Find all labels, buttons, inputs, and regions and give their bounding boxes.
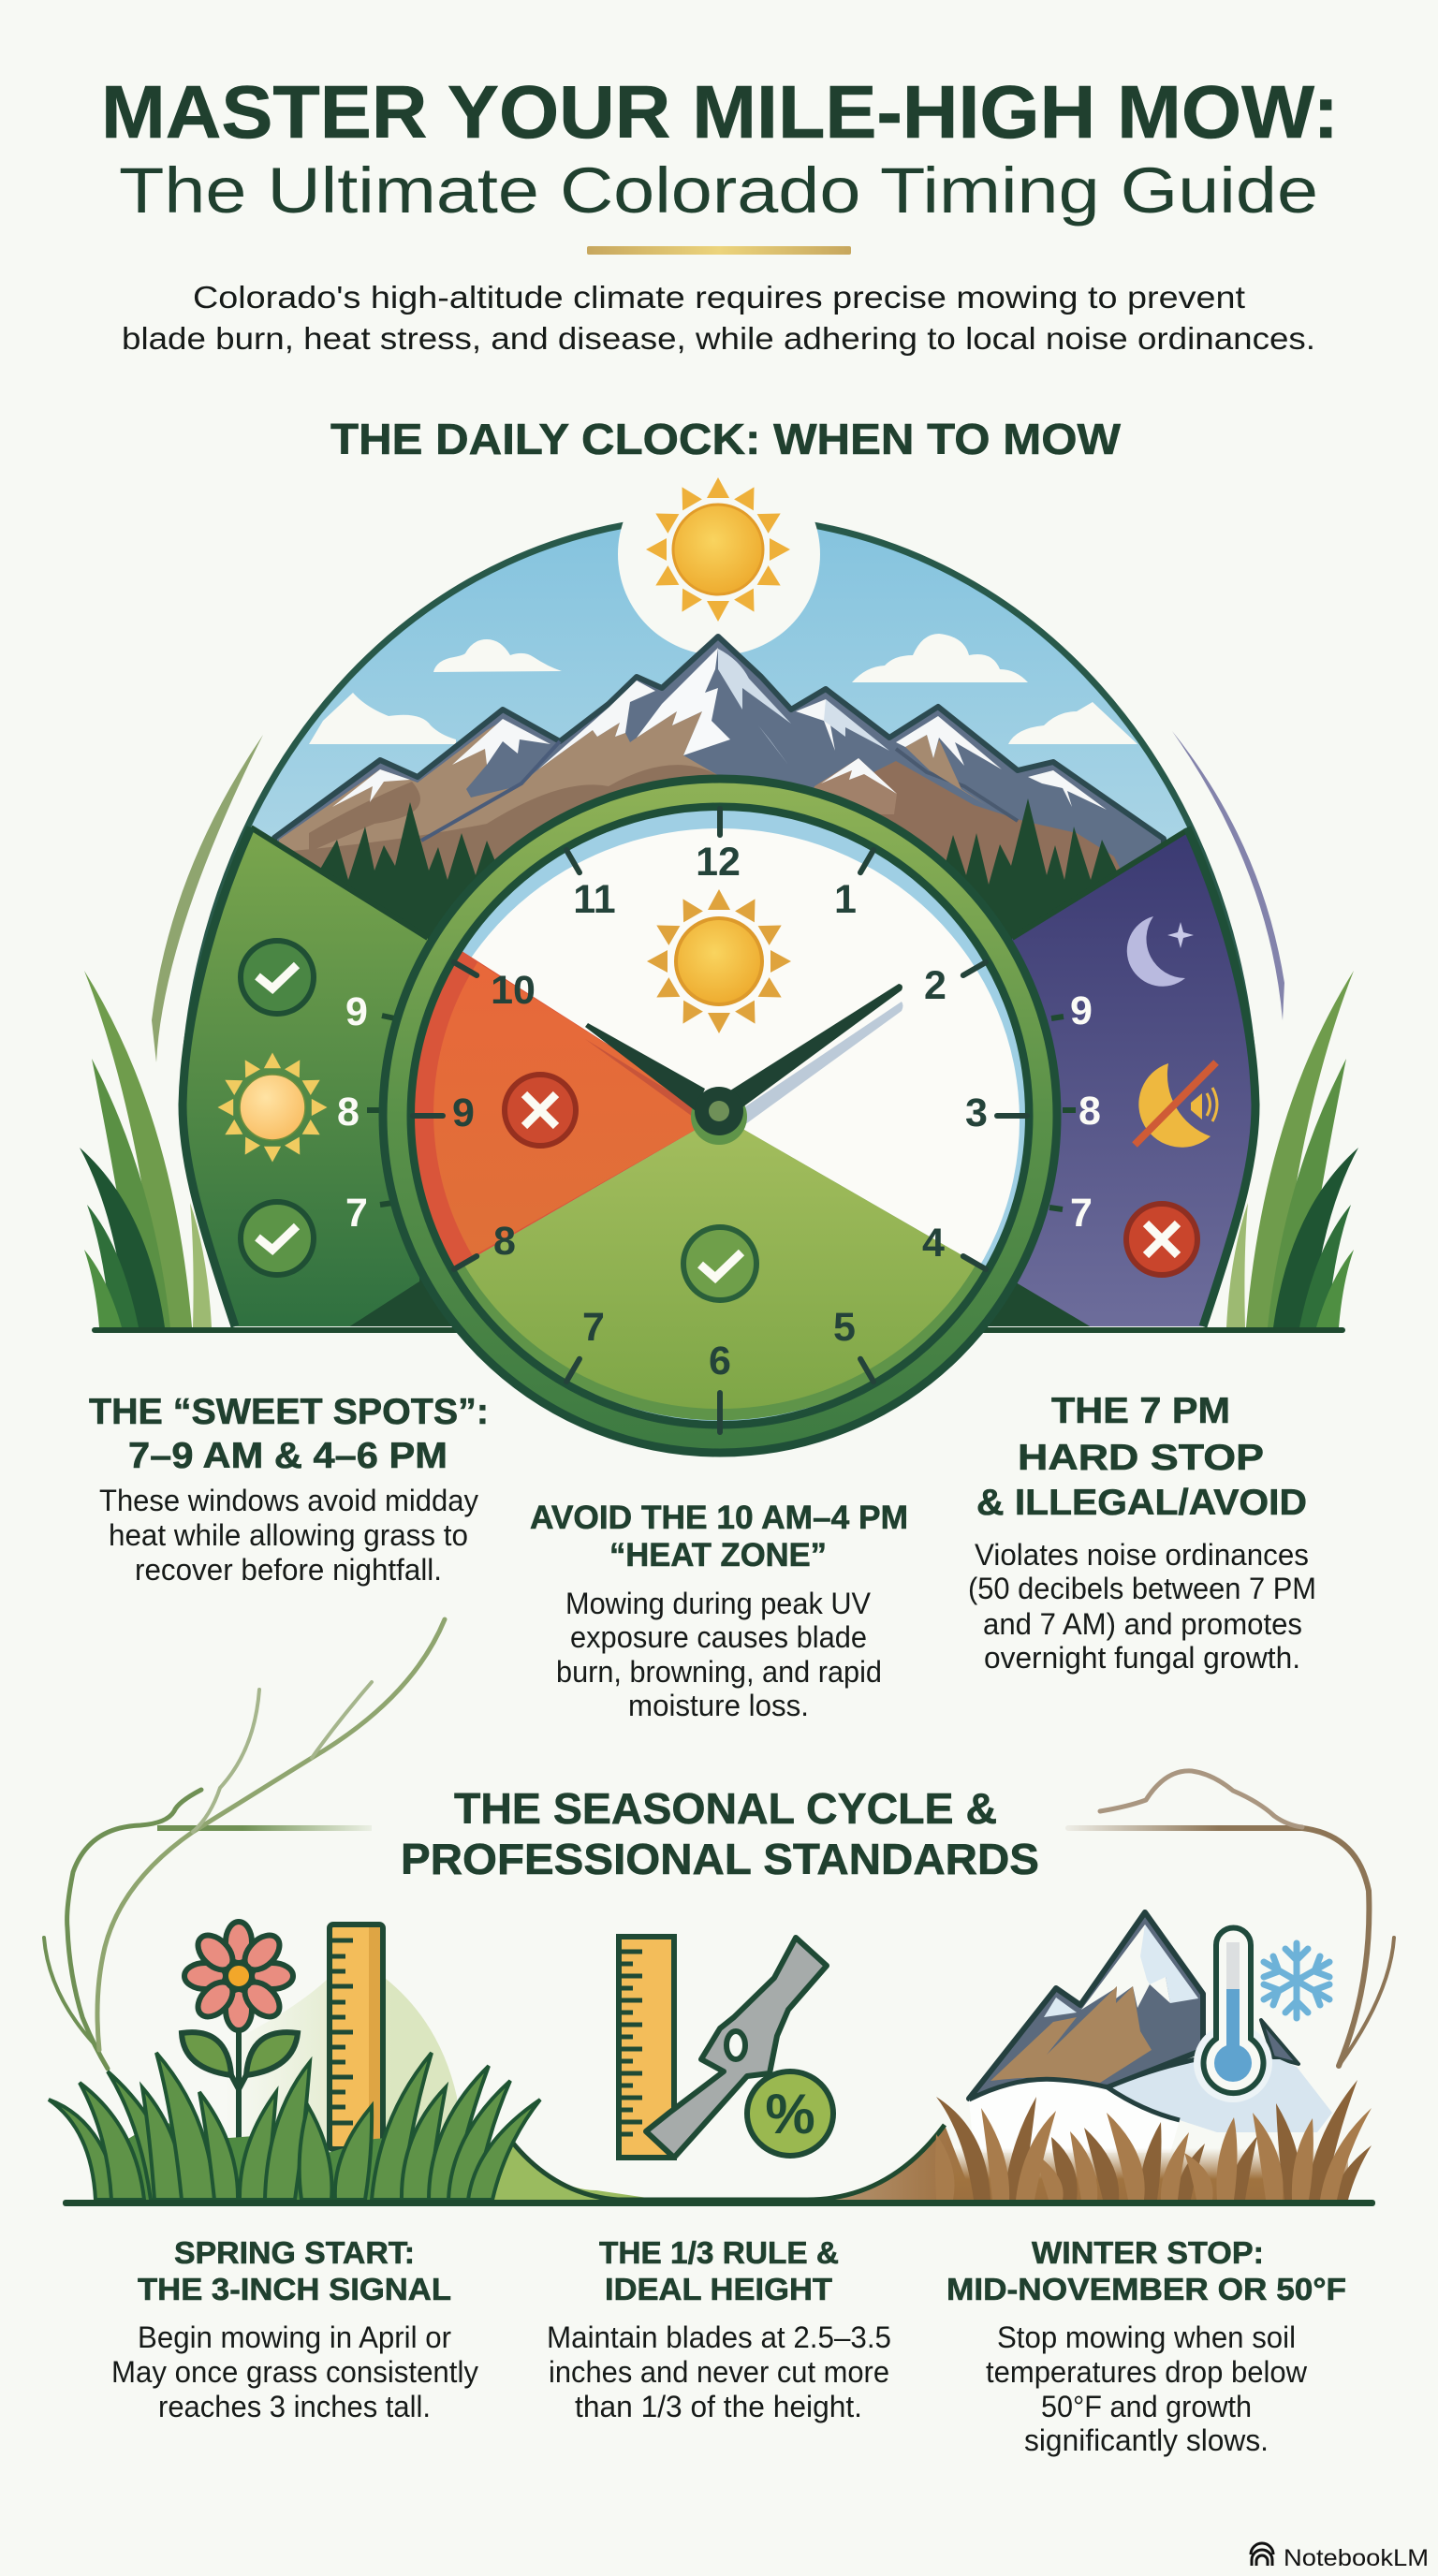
text block: hard stop: THE 7 PM bbox=[1051, 1391, 1230, 1431]
panel: night hard stop bbox=[989, 827, 1251, 1326]
text block: winter stop: 50°F and growth bbox=[1041, 2390, 1252, 2423]
clock numerals: 12 bbox=[696, 840, 741, 885]
right brown slopes bbox=[874, 761, 1120, 884]
text block: sweet spots bbox=[89, 1392, 489, 1587]
text block: hard stop: and 7 AM) and promotes bbox=[983, 1607, 1302, 1641]
title: MASTER YOUR MILE-HIGH MOW: bbox=[101, 70, 1339, 154]
clock hands bbox=[585, 984, 902, 1145]
text block: one third rule: THE 1/3 RULE & bbox=[599, 2235, 839, 2270]
icon: no noise at night bbox=[1135, 1062, 1217, 1148]
icon: moon and star bbox=[1127, 916, 1194, 987]
icon: percent badge bbox=[747, 2071, 833, 2156]
title: The Ultimate Colorado Timing Guide bbox=[119, 154, 1318, 227]
text block: hard stop: Violates noise ordinances bbox=[975, 1538, 1309, 1572]
wedge: morning and evening bbox=[450, 1116, 990, 1420]
text block: sweet spots: These windows avoid midday bbox=[99, 1484, 478, 1517]
ground line: seasonal bbox=[63, 2200, 1375, 2206]
text block: winter stop: temperatures drop below bbox=[986, 2355, 1308, 2389]
icon: spring flower bbox=[182, 1922, 298, 2153]
icon: spring ruler bbox=[330, 1925, 383, 2149]
clock numerals: 3 bbox=[965, 1090, 988, 1135]
left brown slopes bbox=[279, 711, 717, 851]
text block: spring start: Begin mowing in April or bbox=[138, 2320, 451, 2354]
text block: spring start: reaches 3 inches tall. bbox=[158, 2390, 431, 2423]
forest silhouettes bbox=[320, 798, 1116, 940]
text block: spring start: May once grass consistently bbox=[111, 2355, 478, 2389]
text block: sweet spots: recover before nightfall. bbox=[135, 1553, 442, 1587]
icon: check in green zone bbox=[683, 1227, 756, 1300]
text block: winter stop: significantly slows. bbox=[1024, 2423, 1269, 2457]
clock numerals: 7 bbox=[582, 1305, 605, 1350]
grass: right clump bbox=[1226, 971, 1358, 1327]
text block: heat zone: exposure causes blade bbox=[570, 1620, 867, 1654]
heading: seasonal cycle: THE SEASONAL CYCLE & bbox=[454, 1784, 997, 1833]
text block: sweet spots: 7–9 AM & 4–6 PM bbox=[128, 1436, 448, 1476]
clouds bbox=[309, 634, 1137, 744]
ground hills bbox=[178, 1978, 974, 2200]
text block: winter stop: MID-NOVEMBER OR 50°F bbox=[946, 2272, 1346, 2306]
grass: left clump bbox=[80, 971, 212, 1327]
icon: thermometer bbox=[1194, 1928, 1272, 2102]
text block: hard stop: (50 decibels between 7 PM bbox=[968, 1572, 1316, 1605]
icon: ruler and mower blade bbox=[619, 1937, 827, 2158]
clock numerals: 2 bbox=[924, 963, 946, 1008]
heading: seasonal cycle bbox=[401, 1784, 1039, 1883]
icon: cross in heat zone bbox=[505, 1075, 576, 1146]
text block: one third rule: inches and never cut more bbox=[549, 2355, 889, 2389]
arc: right purple flourish bbox=[1172, 731, 1284, 1020]
icon: check bottom bbox=[241, 1202, 314, 1275]
text block: heat zone bbox=[530, 1500, 908, 1722]
panel numbers: 9 bbox=[345, 989, 368, 1034]
dome scene: sky and mountains bbox=[183, 453, 1255, 1326]
text block: spring start: THE 3-INCH SIGNAL bbox=[138, 2272, 451, 2306]
clock bbox=[383, 779, 1057, 1453]
text block: heat zone: burn, browning, and rapid bbox=[556, 1655, 882, 1689]
icon: snowy mountain bbox=[969, 1912, 1332, 2153]
text block: hard stop: & ILLEGAL/AVOID bbox=[976, 1483, 1307, 1523]
clock bezel bbox=[383, 779, 1057, 1453]
text block: one third rule: Maintain blades at 2.5–3.5 bbox=[547, 2320, 891, 2354]
wedge: heat zone bbox=[415, 951, 695, 1266]
text block: winter stop: Stop mowing when soil bbox=[997, 2320, 1296, 2354]
text block: one third rule bbox=[547, 2235, 891, 2423]
spring grass bbox=[49, 2053, 540, 2200]
text block: heat zone: AVOID THE 10 AM–4 PM bbox=[530, 1500, 908, 1536]
text block: hard stop: overnight fungal growth. bbox=[984, 1641, 1300, 1675]
panel: morning sweet spot bbox=[187, 826, 451, 1326]
text block: heat zone: Mowing during peak UV bbox=[565, 1587, 872, 1620]
panel numbers bbox=[1049, 988, 1101, 1236]
clock numerals: 11 bbox=[573, 877, 616, 922]
winter grass bbox=[935, 2080, 1372, 2200]
panel numbers: 7 bbox=[345, 1191, 368, 1236]
icon: check top bbox=[241, 941, 314, 1014]
icon: snowflake bbox=[1264, 1943, 1329, 2018]
text block: sweet spots: THE “SWEET SPOTS”: bbox=[89, 1392, 489, 1432]
mountains bbox=[271, 634, 1167, 940]
text block: hard stop bbox=[968, 1391, 1316, 1675]
icon: red cross bbox=[1126, 1204, 1197, 1275]
title bbox=[101, 70, 1339, 227]
clock ticks bbox=[413, 809, 1027, 1432]
icon: midday sun bbox=[647, 889, 791, 1033]
gold divider bbox=[587, 246, 851, 255]
intro text: blade burn, heat stress, and disease, while adhering to local noise ordinances. bbox=[122, 321, 1315, 356]
panel numbers: 8 bbox=[337, 1090, 360, 1134]
icon: percent badge: % bbox=[765, 2083, 815, 2145]
clock numerals: 1 bbox=[834, 877, 857, 922]
notebooklm badge bbox=[1251, 2543, 1429, 2571]
dome side outline bbox=[183, 827, 1255, 1326]
snow caps right bbox=[718, 649, 791, 724]
icon: sun bbox=[217, 1052, 328, 1163]
clock numerals: 10 bbox=[491, 968, 536, 1013]
heading: seasonal cycle: PROFESSIONAL STANDARDS bbox=[401, 1835, 1039, 1883]
text block: sweet spots: heat while allowing grass to bbox=[109, 1518, 468, 1552]
snow caps left bbox=[332, 769, 410, 807]
intro text bbox=[122, 280, 1315, 356]
flourish: spring vine bbox=[44, 1619, 445, 2069]
clock numerals: 6 bbox=[709, 1339, 731, 1383]
clock numerals: 4 bbox=[922, 1221, 945, 1266]
text block: one third rule: IDEAL HEIGHT bbox=[605, 2272, 832, 2306]
clock numerals: 9 bbox=[452, 1090, 475, 1135]
text block: winter stop: WINTER STOP: bbox=[1032, 2235, 1264, 2270]
panel numbers: 9 bbox=[1070, 988, 1093, 1033]
sun halo bbox=[618, 453, 820, 655]
text block: spring start: SPRING START: bbox=[174, 2235, 415, 2270]
text block: heat zone: moisture loss. bbox=[628, 1689, 809, 1722]
clock numerals bbox=[452, 840, 988, 1383]
arc: left olive flourish bbox=[152, 735, 263, 1062]
clock face bbox=[420, 828, 1020, 1412]
flourish: winter mountain line bbox=[1068, 1771, 1394, 2066]
panel numbers bbox=[337, 989, 395, 1236]
clock numerals: 8 bbox=[493, 1219, 516, 1264]
panel numbers: 7 bbox=[1070, 1191, 1093, 1236]
text block: winter stop bbox=[946, 2235, 1346, 2457]
clock numerals: 5 bbox=[833, 1305, 856, 1350]
intro text: Colorado's high-altitude climate requires precise mowing to prevent bbox=[193, 280, 1245, 315]
ground line bbox=[92, 1327, 1345, 1333]
text block: hard stop: HARD STOP bbox=[1018, 1438, 1264, 1478]
icon: top sun bbox=[646, 477, 790, 622]
panel numbers: 8 bbox=[1078, 1089, 1101, 1134]
text block: heat zone: “HEAT ZONE” bbox=[609, 1537, 827, 1573]
text block: one third rule: than 1/3 of the height. bbox=[575, 2390, 862, 2423]
notebooklm badge: NotebookLM bbox=[1284, 2545, 1429, 2571]
text block: spring start bbox=[111, 2235, 478, 2423]
heading: the daily clock: THE DAILY CLOCK: WHEN TO MOW bbox=[330, 415, 1122, 463]
